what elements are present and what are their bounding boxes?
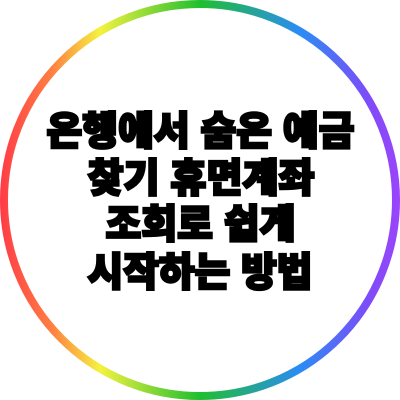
title line 3: 조회로 쉽게 <box>106 203 296 247</box>
title line 2: 찾기 휴면계좌 <box>88 157 314 201</box>
title <box>46 110 354 295</box>
title line 4: 시작하는 방법 <box>88 251 312 295</box>
title line 1: 은행에서 숨은 예금 <box>46 110 354 154</box>
